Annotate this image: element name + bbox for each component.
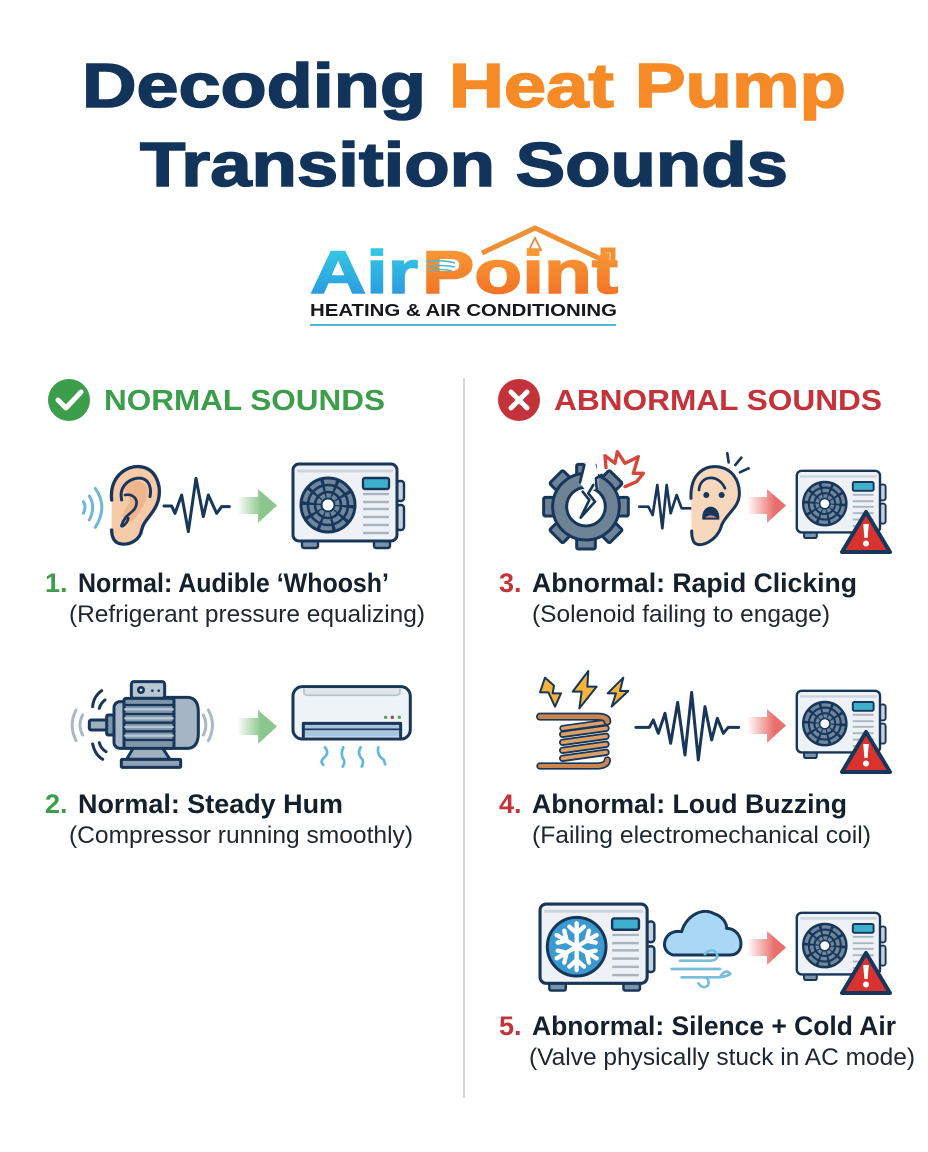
label 4: 4.	[499, 789, 522, 819]
item 2: steady hum	[45, 682, 413, 849]
label 5: 5.	[499, 1011, 522, 1041]
icon: motor and indoor AC	[72, 682, 410, 767]
icon: ear with sound waves and heat pump	[83, 464, 404, 548]
label 2	[45, 789, 413, 849]
heading: normal sounds	[48, 379, 385, 421]
label 3	[499, 568, 857, 628]
logo: AirPoint	[310, 228, 618, 326]
label 2: 2.	[45, 789, 68, 819]
item 1: audible whoosh	[45, 464, 425, 628]
logo: AirPoint: Air	[310, 239, 418, 306]
label 1: 1.	[45, 568, 68, 598]
label 3: 3.	[499, 568, 522, 598]
icon: frozen unit, cold wind cloud, faulty unit	[540, 904, 890, 993]
icon: broken gear, scared ear, faulty unit	[544, 452, 890, 552]
heading: abnormal sounds	[498, 379, 882, 421]
item 4: loud buzzing	[499, 671, 890, 849]
label 5: Abnormal: Silence + Cold Air	[532, 1011, 896, 1041]
title: Decoding	[82, 52, 426, 121]
heading: abnormal sounds: ABNORMAL SOUNDS	[554, 385, 882, 417]
heading: normal sounds: NORMAL SOUNDS	[104, 385, 385, 417]
label 2: (Compressor running smoothly)	[69, 822, 413, 849]
logo: AirPoint: HEATING & AIR CONDITIONING	[310, 300, 617, 320]
logo: AirPoint: Point	[422, 239, 618, 306]
label 3: Abnormal: Rapid Clicking	[532, 568, 857, 598]
label 3: (Solenoid failing to engage)	[532, 601, 830, 628]
label 4: (Failing electromechanical coil)	[532, 822, 871, 849]
label 1	[45, 568, 425, 628]
column divider	[463, 378, 465, 1098]
item 5: silence and cold air	[499, 904, 915, 1071]
label 5: (Valve physically stuck in AC mode)	[529, 1044, 915, 1071]
title: Heat Pump	[449, 52, 846, 121]
label 1: Normal: Audible ‘Whoosh’	[78, 568, 389, 598]
label 4	[499, 789, 871, 849]
title: Transition Sounds	[140, 131, 788, 200]
label 4: Abnormal: Loud Buzzing	[532, 789, 847, 819]
label 1: (Refrigerant pressure equalizing)	[69, 601, 425, 628]
title	[82, 52, 846, 200]
label 2: Normal: Steady Hum	[78, 789, 343, 819]
item 3: rapid clicking	[499, 452, 890, 628]
label 5	[499, 1011, 915, 1071]
icon: coil with sparks, waveform, faulty unit	[540, 671, 890, 772]
